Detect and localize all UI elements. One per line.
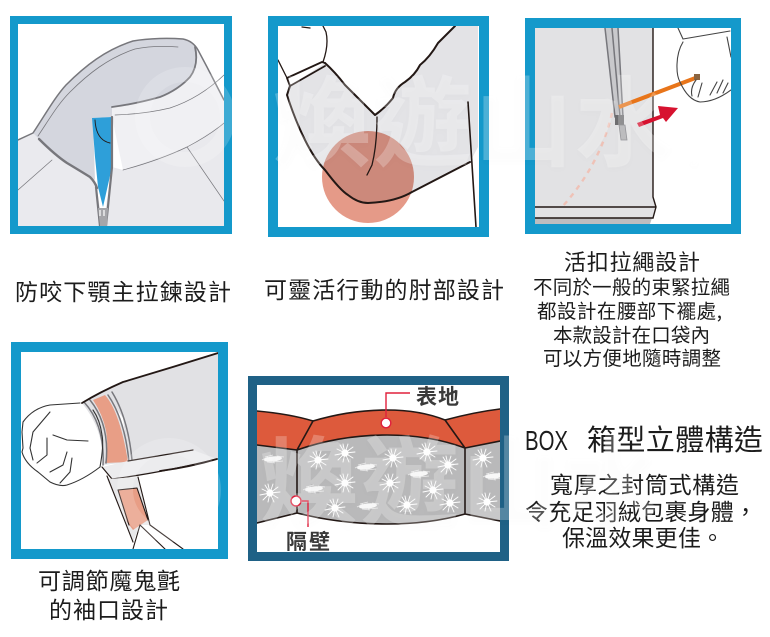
caption body: 可以方便地隨時調整: [543, 342, 721, 371]
caption heading: 活扣拉繩設計: [564, 245, 700, 277]
illustration: jacket collar: [18, 38, 224, 226]
text: box construction description: 保溫效果更佳。: [562, 519, 724, 553]
illustration: pocket drawcord: [535, 28, 731, 224]
frame: [530, 23, 736, 229]
caption: chin guard zipper: 防咬下顎主拉鍊設計: [15, 273, 231, 307]
watermark: bottom: 煥遊山水: [260, 405, 660, 547]
label: shell fabric: [381, 381, 459, 428]
watermark: top: ®: [690, 153, 698, 177]
panel: box wall cross-section: [252, 380, 505, 556]
illustration: bent arm with elbow highlight: [278, 26, 478, 227]
caption body: 都設計在腰部下襬處,: [537, 295, 722, 324]
caption: adjustable cuff: 可調節魔鬼氈: [38, 562, 180, 596]
caption: adjustable cuff: 的袖口設計: [49, 591, 168, 625]
caption body: 本款設計在口袋內: [553, 319, 710, 348]
heading: box construction: BOX: [525, 425, 568, 456]
chamber lines: [257, 409, 500, 524]
caption: adjustable cuff: [38, 562, 180, 625]
frame: [16, 347, 223, 554]
shell fabric: [257, 409, 500, 450]
panel: elbow design: [273, 21, 484, 232]
heading: box construction: 箱型立體構造: [587, 417, 763, 459]
text: box construction description: 寬厚之封筒式構造: [550, 466, 739, 500]
panel: drawcord design: [530, 23, 736, 229]
label: baffle wall: [286, 496, 330, 556]
caption body: 不同於一般的束緊拉繩: [533, 271, 730, 300]
fill chambers: [257, 435, 500, 524]
text: box construction description: 令充足羽絨包裹身體，: [525, 493, 757, 527]
watermark: top: 煥遊山水: [273, 45, 673, 187]
frame: [252, 380, 504, 556]
caption: elbow design: 可靈活行動的肘部設計: [264, 271, 504, 305]
label: shell fabric: 表地: [416, 381, 459, 411]
panel: adjustable cuff: [16, 347, 223, 554]
frame: [273, 21, 484, 232]
diagram: down chambers: [257, 409, 505, 524]
caption: drawcord description: [533, 245, 730, 371]
text: box construction description: [525, 466, 757, 553]
caption body: [533, 271, 730, 371]
illustration: cuff with hook and loop strap: [22, 353, 218, 549]
down clusters: [260, 443, 505, 517]
panel: chin guard zipper: [14, 20, 228, 230]
frame: [14, 20, 228, 230]
label: baffle wall: 隔壁: [286, 526, 330, 556]
